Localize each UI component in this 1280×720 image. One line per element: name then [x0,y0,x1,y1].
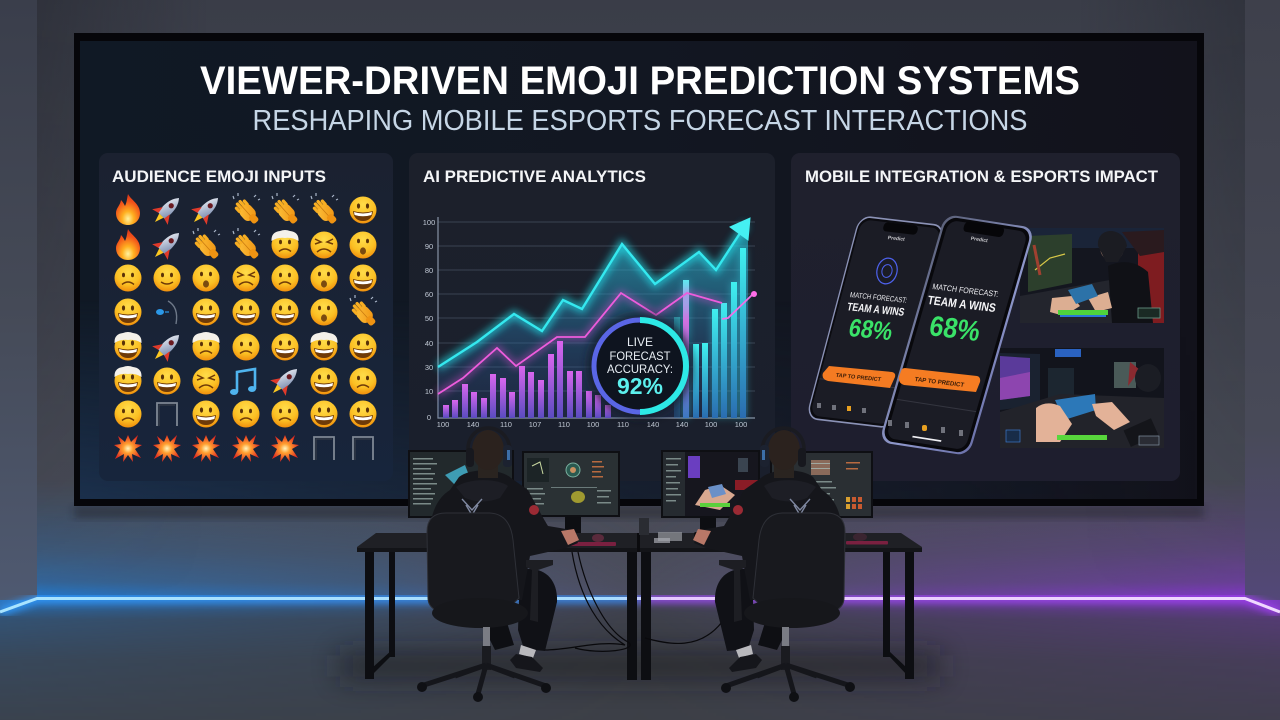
heading: audience emoji inputs: AUDIENCE EMOJI INPUTS [112,167,326,186]
y axis labels: 50 [425,314,433,323]
area under forecast line [438,220,748,418]
emoji row 6 [114,361,376,401]
x axis labels: 100 [437,420,449,429]
live forecast accuracy gauge: 92% [617,373,663,399]
live forecast accuracy gauge: FORECAST [610,349,671,363]
y axis labels: 90 [425,242,433,251]
gamer: left [417,428,579,702]
rear phone screen content: Predict [887,235,906,243]
arrow head [730,218,750,240]
subtitle: RESHAPING MOBILE ESPORTS FORECAST INTERACTIONS [252,105,1028,137]
x axis labels: 110 [558,420,570,429]
front phone screen content: MATCH FORECAST: [932,282,999,299]
front phone screen content: Predict [970,236,989,244]
rear phone screen content: TEAM A WINS [846,301,905,319]
monitor 4 [770,451,873,518]
desk accessories [516,518,888,546]
forecast line [438,224,752,394]
x axis labels: 100 [587,420,599,429]
y axis labels: 60 [425,290,433,299]
y axis labels: 30 [425,363,433,372]
x axis labels: 107 [529,420,541,429]
emoji grid [114,190,379,462]
emoji row 4 [114,295,379,329]
x axis labels: 140 [647,420,659,429]
front phone screen content: TEAM A WINS [926,293,997,315]
monitor 3 [661,450,760,533]
emoji row 8 [114,435,373,462]
x axis labels: 100 [735,420,747,429]
rear phone screen content [817,235,908,413]
live forecast accuracy gauge: ACCURACY: [607,362,673,376]
live forecast accuracy gauge: LIVE [627,335,653,349]
panel: mobile integration and esports impact [791,153,1180,481]
emoji row 7 [114,400,376,428]
bars [443,341,611,418]
bar glow [683,248,746,418]
desk [357,518,922,680]
front phone screen content: TAP TO PREDICT [914,376,965,389]
cables [545,552,722,651]
panel: AI predictive analytics [409,153,775,481]
front phone screen content [888,236,999,436]
rear phone screen content: TAP TO PREDICT [835,373,882,383]
heading: AI predictive analytics: AI PREDICTIVE ANALYTICS [423,167,646,186]
phone: rear [806,216,945,428]
x axis labels: 110 [500,420,512,429]
y axis labels: 100 [423,218,435,227]
floor [0,599,1280,720]
emoji row 2 [116,225,376,265]
monitor 2 [522,451,620,533]
x axis labels: 100 [705,420,717,429]
y axis labels [423,218,435,422]
rear phone screen content: MATCH FORECAST: [849,290,908,305]
gamer: right [693,428,855,702]
heading: mobile integration: MOBILE INTEGRATION & ESPORTS IMPACT [805,167,1159,186]
front phone screen content: 68% [927,310,983,348]
live forecast accuracy gauge [587,313,693,419]
emoji row 1 [116,190,376,230]
y axis labels: 10 [425,387,433,396]
emoji row 3 [114,264,376,292]
x axis labels: 140 [467,420,479,429]
line and bar chart [423,217,757,429]
monitor 1 [408,450,514,518]
neon floor line [0,598,1280,612]
phone: front [879,214,1035,456]
title: VIEWER-DRIVEN EMOJI PREDICTION SYSTEMS [200,59,1080,103]
gameplay photo: bottom [1000,348,1164,448]
emoji row 5 [114,327,376,367]
x axis labels: 110 [617,420,629,429]
x axis labels [437,420,747,429]
panel: audience emoji inputs [99,153,393,481]
x axis labels: 140 [676,420,688,429]
gameplay photo: top [1020,228,1164,323]
rear phone screen content: 68% [846,314,895,346]
y axis labels: 80 [425,266,433,275]
y axis labels: 0 [427,413,431,422]
y axis labels: 40 [425,339,433,348]
wall display [74,33,1204,506]
